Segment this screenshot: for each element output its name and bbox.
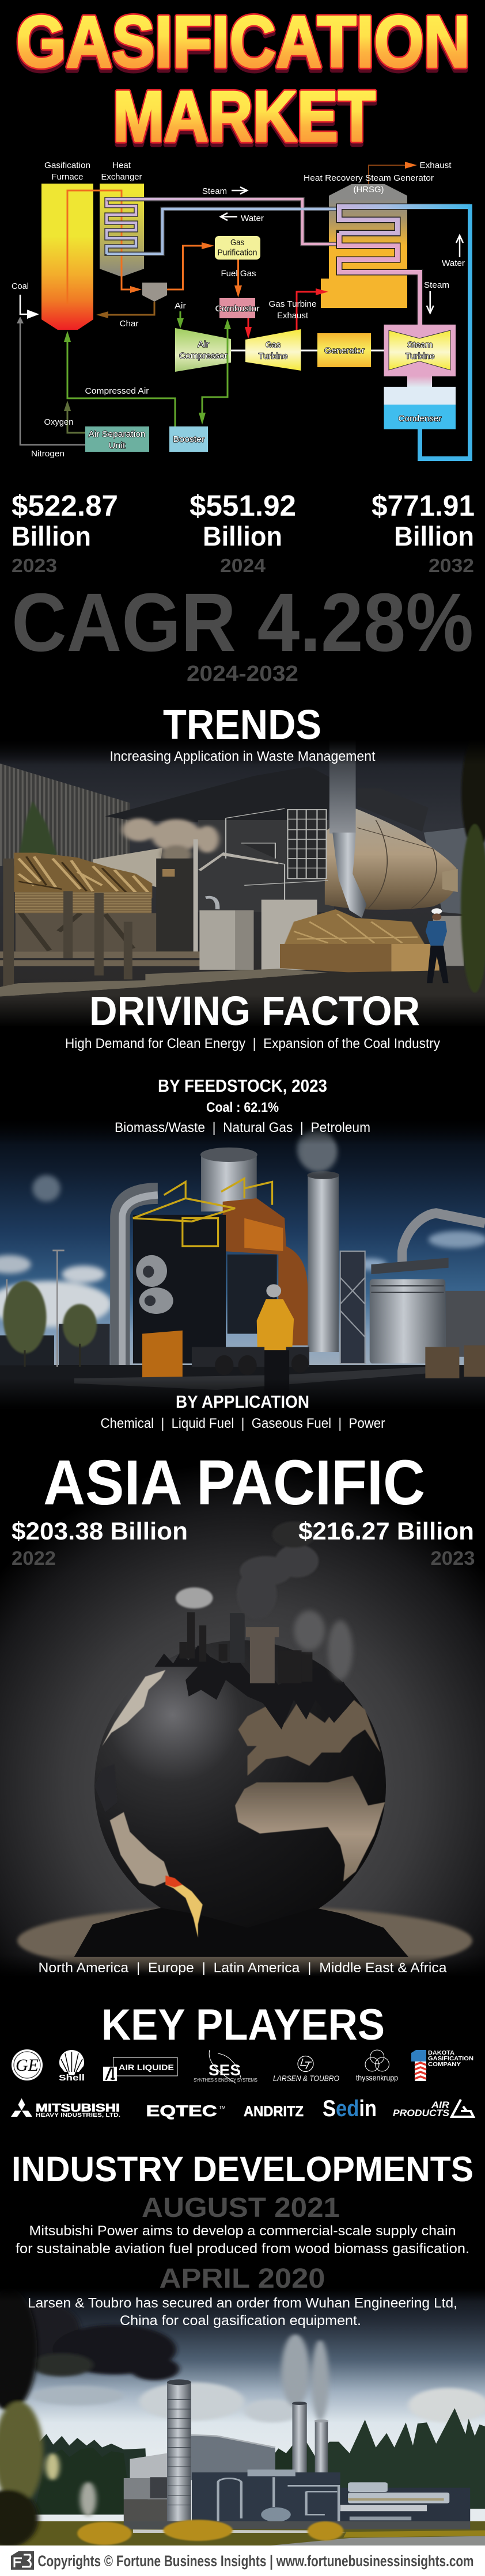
title (16, 1, 470, 160)
diagram labels: Booster (173, 435, 205, 444)
gas line to purification (167, 246, 203, 289)
yellow bushes (77, 2520, 343, 2545)
main stack (167, 2379, 191, 2521)
diagram labels: Gasification (44, 161, 90, 170)
tree (18, 801, 57, 856)
diagram labels (12, 161, 465, 459)
logo: EQTEC (146, 2102, 226, 2120)
interior of plant (198, 820, 334, 912)
logo: EQTEC: TM (219, 2105, 226, 2110)
tank right (370, 1279, 445, 1363)
steam arrow right (232, 187, 247, 194)
water return pipe (420, 204, 470, 459)
floor disc (17, 1906, 472, 1975)
sign (162, 869, 175, 877)
white cabinets (199, 900, 317, 970)
diagram labels: Nitrogen (31, 449, 65, 459)
machine behind worker (433, 916, 464, 966)
black smoke (237, 1522, 319, 1619)
rear tower (200, 1148, 257, 1211)
logo: Mitsubishi: MITSUBISHI (36, 2102, 120, 2114)
diagram labels: Gas (266, 340, 281, 350)
logo: Larsen and Toubro (273, 2056, 339, 2083)
concrete slab (0, 969, 328, 997)
development text: Mitsubishi: for sustainable aviation fuel produced from wood biomass gasification. (16, 2241, 469, 2257)
tree line centre (272, 2445, 292, 2480)
orange base (142, 1331, 183, 1380)
diagram labels: Fuel Gas (221, 269, 256, 279)
rotors (136, 1255, 173, 1314)
char line (107, 302, 154, 315)
tree line left front (34, 2448, 131, 2514)
turbine exhaust arrow (297, 288, 328, 331)
arrow to purification (202, 242, 214, 249)
scaffold tower (223, 809, 328, 901)
logo: Dakota Gasification: DAKOTA (428, 2049, 454, 2056)
posts (3, 859, 132, 987)
photo: polluted globe (0, 1433, 485, 1977)
other regions: North America | Europe | Latin America | Middle East & Africa (38, 1960, 447, 1976)
pipework (192, 2470, 470, 2524)
platform right (371, 1257, 449, 1274)
trees (3, 1281, 97, 1354)
air compressor (175, 328, 231, 372)
logo: Larsen and Toubro: LARSEN & TOUBRO (273, 2074, 339, 2083)
left foreground foliage (0, 2288, 59, 2547)
compressed air arrows (64, 319, 231, 425)
left pipe (120, 1194, 158, 1365)
dark column (156, 859, 194, 887)
region stat 2022 (12, 1518, 188, 1569)
timber crate (280, 944, 439, 975)
development date: August 2021: AUGUST 2021 (142, 2193, 340, 2223)
diagram labels: Char (120, 319, 139, 329)
tree trunks (25, 1344, 80, 1367)
gas purification box (215, 236, 260, 260)
fade top (0, 740, 485, 762)
nitrogen arrow (17, 317, 24, 323)
clouds (31, 2382, 485, 2422)
ground (0, 2521, 485, 2546)
ground (0, 970, 439, 997)
diagram labels: Gas Turbine (268, 299, 317, 309)
wheels (192, 1347, 309, 1375)
machine frame (133, 1215, 226, 1363)
logo: Dakota Gasification (411, 2049, 473, 2081)
title: MARKET (113, 81, 376, 160)
footer logo (11, 2551, 34, 2570)
stat: 2023 market size: 2023 (12, 555, 57, 576)
logo: Mitsubishi: HEAVY INDUSTRIES, LTD. (36, 2112, 120, 2118)
oxygen arrow (64, 401, 71, 411)
continents (94, 1670, 385, 1887)
water arrow left (221, 213, 237, 220)
stat: 2032 market size (372, 489, 475, 576)
diagram labels: Heat Recovery Steam Generator (304, 173, 434, 183)
separator (142, 283, 167, 302)
nitrogen line (20, 322, 85, 445)
lower wing (124, 2477, 167, 2521)
diagram labels: Exhaust (277, 311, 309, 321)
grass band (343, 2531, 485, 2537)
development text: Mitsubishi: Mitsubishi Power aims to develop a commercial-scale supply chain (29, 2223, 456, 2239)
white cloud (176, 1587, 213, 1609)
syngas arrow (130, 286, 142, 293)
stat: 2023 market size: $522.87 (12, 489, 118, 522)
heading: driving factor: DRIVING FACTOR (89, 989, 420, 1034)
title: MARKET (113, 77, 376, 157)
fuel gas line (237, 260, 239, 287)
worker in yellow jacket (257, 1284, 294, 1397)
heading: by feedstock: BY FEEDSTOCK, 2023 (158, 1076, 327, 1096)
stat: 2032 market size: Billion (394, 521, 474, 551)
right back building (424, 826, 485, 916)
stack (307, 1171, 339, 1352)
combustor box (219, 298, 255, 318)
heading: industry developments: INDUSTRY DEVELOPMENTS (12, 2150, 473, 2189)
tank (325, 809, 458, 910)
ground (0, 1365, 485, 1408)
orange box (244, 1218, 283, 1251)
grey smoke (294, 1610, 353, 1680)
generator (317, 333, 371, 367)
X beams (17, 908, 133, 951)
diagram labels: Heat (112, 161, 131, 170)
diagram labels: Water (241, 214, 264, 223)
fade bottom (0, 1378, 485, 1409)
diagram labels: Exchanger (101, 172, 142, 182)
yellow railings (133, 1179, 272, 1246)
diagram labels: Steam (202, 186, 227, 196)
wooden bin (15, 892, 151, 913)
trends text: Increasing Application in Waste Management (109, 749, 376, 764)
diagram labels: Steam (424, 280, 449, 290)
diagram labels: Exhaust (419, 161, 452, 170)
logo: Shell: Shell (59, 2073, 85, 2083)
fuel gas arrow (234, 285, 242, 298)
development text: Larsen and Toubro (28, 2295, 457, 2329)
fade bottom (0, 994, 485, 1027)
wood pile (14, 853, 152, 898)
photo: industrial plant in forest (0, 2288, 485, 2547)
grey support beam (198, 853, 278, 871)
dark panel (228, 1255, 277, 1334)
steam arrow down (427, 291, 434, 313)
feedstock segments: Biomass/Waste | Natural Gas | Petroleum (115, 1120, 370, 1135)
stack smoke (300, 1132, 337, 1172)
logo: SES: SYNTHESIS ENERGY SYSTEMS (194, 2078, 257, 2083)
diagram labels: Compressed Air (85, 386, 149, 396)
white pole (194, 839, 198, 957)
coal arrow (20, 295, 39, 319)
steam turbine core (389, 330, 450, 370)
stat: 2023 market size (12, 489, 118, 576)
main chimney (246, 1627, 279, 1683)
stat: 2024 market size: $551.92 (190, 489, 296, 522)
shed panels (93, 848, 162, 887)
region stat 2022: $203.38 Billion (12, 1518, 188, 1545)
tank hood (381, 815, 426, 831)
scaffold right (340, 1251, 365, 1363)
diagram labels: Turbine (406, 351, 434, 361)
air separation unit (85, 426, 149, 452)
footer (0, 2545, 485, 2576)
steam cloud (122, 818, 219, 864)
mountains (154, 1645, 354, 1729)
steam plumes (282, 2334, 329, 2421)
diagram labels: Air (198, 340, 209, 349)
region stat 2023 (298, 1518, 475, 1569)
region stat 2023: $216.27 Billion (298, 1518, 474, 1545)
fire (165, 1876, 203, 1938)
diagram labels: Steam (407, 340, 433, 350)
heat exchanger block (100, 184, 144, 277)
tank hatch (442, 869, 458, 892)
title: MARKET (113, 77, 376, 157)
diagram labels: Turbine (258, 351, 288, 361)
globe sphere (94, 1640, 386, 1931)
fence (124, 2521, 470, 2529)
water arrow up (456, 235, 463, 257)
diagram labels: Oxygen (44, 417, 74, 427)
steam turbine housing (384, 325, 456, 376)
process flow diagram (12, 161, 470, 459)
air arrow (177, 311, 184, 329)
driving factor text: High Demand for Clean Energy | Expansion of the Coal Industry (65, 1036, 440, 1051)
condenser neck (407, 376, 432, 387)
logo: GE: GE (16, 2056, 39, 2075)
syngas line (67, 190, 131, 304)
silver duct (332, 833, 366, 918)
stat: 2023 market size: Billion (12, 521, 91, 551)
diagram labels: Purification (218, 249, 257, 258)
stat: 2032 market size: 2032 (429, 555, 474, 576)
beams (0, 951, 215, 966)
diagram labels: Air (175, 301, 186, 311)
pipe elbow (206, 897, 218, 909)
diagram labels: Compressor (179, 351, 228, 361)
low building (130, 2453, 167, 2478)
logo: Dakota Gasification: COMPANY (428, 2061, 461, 2068)
logo: Shell (59, 2050, 85, 2083)
development date: April 2020: APRIL 2020 (159, 2263, 325, 2294)
diagram labels: (HRSG) (354, 185, 384, 195)
shaft lines (231, 350, 388, 351)
stack 3 (315, 2419, 328, 2484)
logo: thyssenkrupp (356, 2050, 398, 2082)
booster (169, 426, 208, 452)
development text: Mitsubishi (16, 2223, 469, 2257)
furnace block (41, 184, 93, 330)
building railing (191, 2435, 275, 2448)
logo: Air Products: AIR (431, 2099, 450, 2110)
region stat 2023: 2023 (431, 1548, 475, 1569)
compressed air lines (67, 329, 228, 426)
rack right (445, 1291, 485, 1357)
oxygen line (67, 410, 85, 433)
corrugated building (0, 764, 130, 866)
development text: Larsen and Toubro: China for coal gasification equipment. (120, 2313, 361, 2329)
hose (402, 1213, 485, 1271)
tree line left back (22, 2426, 149, 2514)
tree line right (306, 2408, 485, 2509)
stat: 2024 market size (190, 489, 296, 576)
logo: Air Liquide: AIR LIQUIDE (119, 2063, 174, 2072)
under crate frame (16, 913, 156, 951)
HRSG block (321, 184, 407, 308)
heading: trends: TRENDS (163, 702, 321, 748)
orange duct (223, 1198, 308, 1346)
diagram labels: Unit (108, 441, 126, 451)
heading: key players: KEY PLAYERS (101, 2000, 385, 2049)
logo: Andritz: ANDRITZ (244, 2104, 304, 2120)
tank seams (357, 820, 437, 908)
far buildings (0, 1324, 110, 1367)
rotors inner (143, 1266, 156, 1306)
roof structure (105, 767, 331, 822)
fade top (0, 1119, 485, 1145)
logo: Air Products: PRODUCTS (393, 2108, 450, 2118)
gas turbine (245, 329, 301, 371)
logo: Dakota Gasification: GASIFICATION (428, 2055, 473, 2062)
diagram labels: Generator (324, 346, 365, 356)
logo: Sedin: Sedin (323, 2096, 377, 2121)
planters (425, 1346, 485, 1378)
heading: by application: BY APPLICATION (176, 1392, 309, 1412)
stat: 2032 market size: $771.91 (372, 489, 475, 522)
diagram labels: Combustor (215, 304, 260, 314)
duct upper (329, 740, 356, 833)
steam left (80, 2482, 96, 2517)
stat: 2024 market size: 2024 (220, 555, 266, 576)
diagram labels: Furnace (52, 172, 83, 182)
logo: GE (12, 2049, 43, 2080)
condenser (384, 387, 456, 429)
building block (191, 2436, 275, 2480)
logo: Mitsubishi (11, 2098, 120, 2118)
road (263, 2536, 485, 2546)
photo: gasification equipment (0, 1119, 485, 1409)
clouds (0, 1129, 485, 1327)
fade top (0, 2288, 485, 2301)
foliage right (461, 736, 485, 993)
fade bottom (0, 1954, 485, 1977)
chip heap (285, 909, 425, 944)
diagram labels: Coal (12, 281, 29, 291)
photo: biomass plant (0, 736, 485, 1027)
city towers (179, 1612, 312, 1683)
development text: Larsen and Toubro: Larsen & Toubro has secured an order from Wuhan Engineering Ltd, (28, 2295, 457, 2311)
diagram labels: Water (442, 258, 465, 268)
logo: Air Liquide (103, 2057, 177, 2081)
exhaust arrow (369, 162, 417, 184)
lamp post (7, 1251, 65, 1367)
coal share: Coal : 62.1% (206, 1100, 279, 1115)
worker (426, 908, 449, 983)
HRSG coils (337, 207, 470, 326)
light road (133, 2529, 346, 2533)
logo: EQTEC: EQTEC (146, 2102, 217, 2120)
logo: SES (194, 2050, 257, 2083)
heat exchanger tubes (107, 199, 338, 254)
combustor to turbine arrow (245, 318, 252, 339)
diagram labels: Condenser (399, 414, 441, 424)
CAGR period: 2024-2032 (187, 662, 298, 686)
heading: asia pacific: ASIA PACIFIC (43, 1447, 425, 1518)
slab (74, 1367, 427, 1390)
logo: thyssenkrupp: thyssenkrupp (356, 2073, 398, 2082)
diagram labels: Air Separation (89, 429, 145, 439)
stack 2 (292, 2402, 307, 2485)
application segments: Chemical | Liquid Fuel | Gaseous Fuel | Power (100, 1416, 385, 1431)
logo: Air Products (393, 2099, 473, 2118)
logo: SES: SES (209, 2061, 241, 2079)
region stat 2022: 2022 (12, 1548, 56, 1569)
dark smoke (0, 2301, 179, 2380)
rubble (74, 1908, 408, 1957)
stat: 2024 market size: Billion (203, 521, 282, 551)
char arrow (96, 311, 108, 318)
diagram labels: Gas (230, 238, 244, 247)
